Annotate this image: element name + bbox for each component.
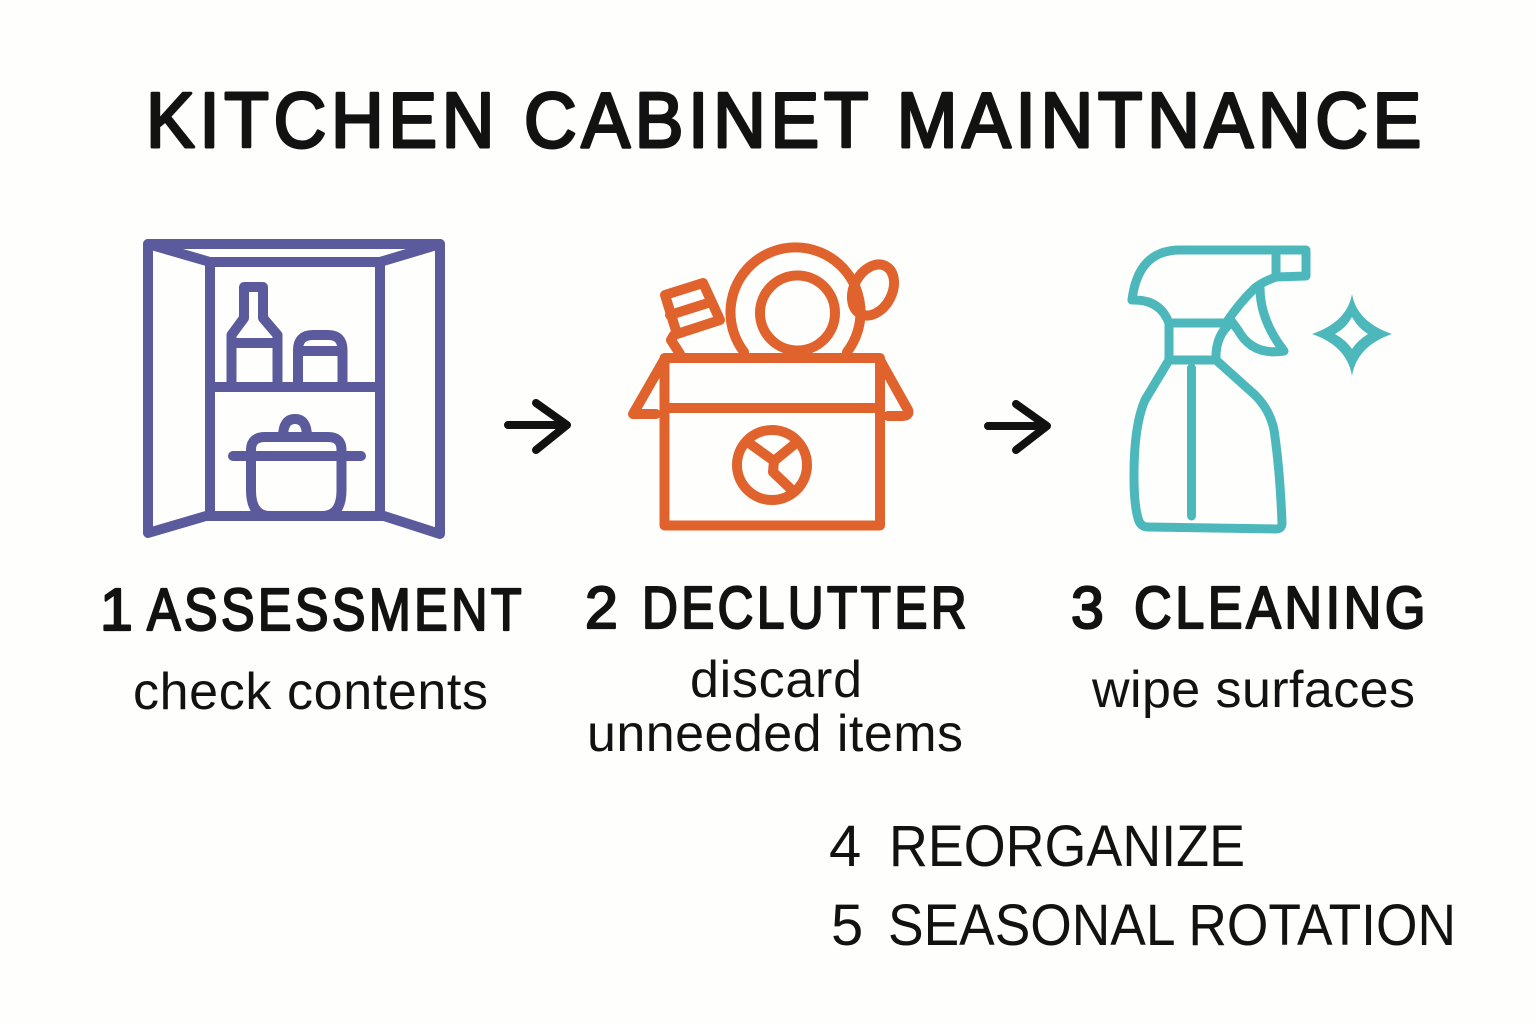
step 1 heading: ASSESSMENT xyxy=(147,577,525,643)
step 1 heading: 1 xyxy=(100,577,133,643)
title: KITCHEN CABINET MAINTNANCE xyxy=(146,76,1426,164)
icon: spray bottle xyxy=(1132,250,1392,529)
icon: sparkle xyxy=(1312,294,1392,376)
arrow: step 1 to 2 xyxy=(508,403,567,450)
step 4: 4 xyxy=(829,814,861,879)
step 2 description: unneeded items xyxy=(587,705,963,763)
step 2 heading: 2 xyxy=(585,575,618,641)
step 3 heading: CLEANING xyxy=(1134,575,1429,641)
step 3 heading: 3 xyxy=(1071,575,1104,641)
icon: open cabinet xyxy=(148,244,440,534)
step 4: REORGANIZE xyxy=(889,814,1245,879)
step 5: SEASONAL ROTATION xyxy=(888,893,1456,958)
step 1 description: check contents xyxy=(133,663,488,721)
step 2 heading: DECLUTTER xyxy=(642,575,970,641)
step 2 description xyxy=(587,651,963,763)
step 5: 5 xyxy=(831,893,863,958)
icon: declutter box xyxy=(633,247,908,526)
arrow: step 2 to 3 xyxy=(988,404,1047,450)
step 3 description: wipe surfaces xyxy=(1091,661,1415,719)
step 2 description: discard xyxy=(690,651,862,709)
